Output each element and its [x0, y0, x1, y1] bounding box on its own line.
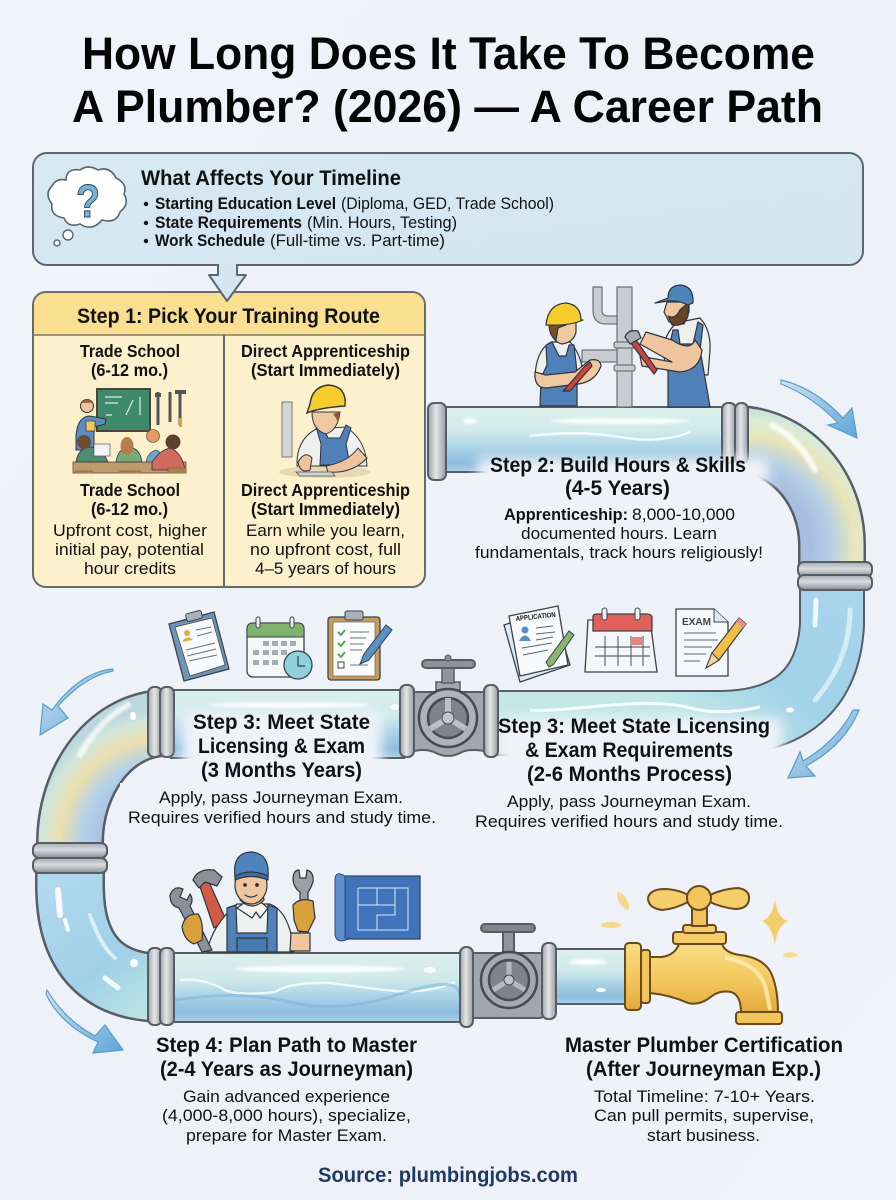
column: direct apprenticeship: no upfront cost, full: [250, 540, 401, 559]
text block: master plumber certification: start business.: [647, 1126, 760, 1145]
pipe: bottom straight section: [170, 952, 465, 1023]
column: trade school: (6-12 mo.): [91, 360, 168, 380]
text block: step 3 right: & Exam Requirements: [525, 738, 733, 762]
column: trade school: Upfront cost, higher: [53, 521, 207, 540]
text block: step 3 left: (3 Months Years): [201, 758, 362, 782]
text block: step 2: documented hours. Learn: [521, 524, 717, 543]
arrow: top right: [781, 380, 857, 438]
text block: step 3 left: Step 3: Meet State: [193, 710, 370, 734]
pipe: middle straight section: [170, 689, 405, 759]
arrow: from timeline panel down to step 1: [209, 264, 246, 301]
icons: clipboard, calendar with clock, checklist: [169, 610, 392, 681]
icon: calendar with clock: [247, 617, 312, 679]
text block: step 4: [156, 1033, 418, 1145]
icon: profile clipboard: [169, 610, 229, 681]
text block: master plumber certification: Total Timeline: 7-10+ Years.: [594, 1087, 815, 1106]
icon: golden faucet: [625, 886, 782, 1024]
icons: application, calendar, exam: [504, 606, 746, 682]
bullet list: Starting Education Level: [155, 194, 336, 213]
pipe: upper right bend: [735, 425, 832, 570]
icon: application form: [504, 606, 574, 682]
decorative sparkles near faucet: [601, 890, 797, 958]
text block: step 2: [475, 453, 763, 562]
column: direct apprenticeship: Direct Apprenticeship: [241, 341, 410, 361]
pipe: left lower bend: [58, 868, 165, 988]
bullet list: Work Schedule: [155, 231, 265, 250]
column: direct apprenticeship: 4–5 years of hours: [255, 559, 396, 578]
journeyman plumber: [625, 285, 710, 407]
text block: step 4: Gain advanced experience: [183, 1087, 390, 1106]
pipe flanges: [33, 403, 872, 1025]
text block: step 4: (2-4 Years as Journeyman): [160, 1057, 413, 1081]
column: trade school: (6-12 mo.): [91, 499, 168, 519]
illustration: two plumbers working on a pipe: [535, 285, 710, 407]
icon: exam paper and pencil: EXAM: [682, 617, 711, 628]
column: direct apprenticeship: [241, 341, 410, 578]
text block: master plumber certification: Master Plumber Certification: [565, 1033, 843, 1057]
upright pipes: [582, 287, 635, 407]
pipe: top straight section: [430, 406, 730, 473]
text block: step 2: Apprenticeship:: [504, 505, 628, 524]
heading: step 1: Step 1: Pick Your Training Route: [77, 304, 380, 328]
text block: step 2: Step 2: Build Hours & Skills: [490, 453, 746, 477]
bullet list: State Requirements: [155, 213, 302, 232]
icon: apprentice with hard hat: [279, 385, 371, 478]
icon: classroom: [73, 389, 186, 473]
text block: step 3 right: Apply, pass Journeyman Exam.: [507, 792, 751, 811]
column: direct apprenticeship: Earn while you learn,: [246, 521, 405, 540]
arrow: left lower: [46, 990, 123, 1053]
text block: master plumber certification: Can pull permits, supervise,: [594, 1106, 814, 1125]
title: How Long Does It Take To Become: [82, 28, 815, 79]
column: direct apprenticeship: (Start Immediately): [251, 499, 400, 519]
journeyman plumber figure: [170, 852, 315, 952]
bullet list: (Min. Hours, Testing): [307, 213, 457, 232]
bullet list: [144, 194, 554, 250]
arrow: right lower: [788, 710, 859, 778]
column: trade school: initial pay, potential: [55, 540, 204, 559]
text block: step 3 right: [475, 714, 783, 831]
valve: middle pipe: [400, 655, 498, 757]
pipe: lower right bend: [490, 585, 850, 723]
text block: step 2: 8,000-10,000: [632, 505, 735, 524]
title: [72, 28, 823, 132]
pipe: section before faucet: [555, 948, 627, 1005]
title: A Plumber? (2026) — A Career Path: [72, 81, 823, 132]
text glows fading the pipe behind the labels: [182, 458, 782, 802]
bullet list: (Diploma, GED, Trade School): [341, 194, 554, 213]
icon: checklist clipboard: [328, 611, 392, 680]
column: trade school: Trade School: [80, 341, 180, 361]
icon: blueprint: [335, 874, 420, 941]
text block: master plumber certification: (After Journeyman Exp.): [586, 1057, 821, 1081]
icon: thought cloud with question mark: ?: [76, 175, 100, 227]
text block: step 3 right: Requires verified hours and study time.: [475, 812, 783, 831]
text block: step 3 left: Apply, pass Journeyman Exam.: [159, 788, 403, 807]
text block: step 3 left: Licensing & Exam: [198, 734, 365, 758]
column: direct apprenticeship: Direct Apprenticeship: [241, 480, 410, 500]
text block: step 3 right: Step 3: Meet State Licensing: [498, 714, 770, 738]
icon: thought cloud with question mark: [48, 167, 126, 246]
column: trade school: Trade School: [80, 480, 180, 500]
illustration: journeyman plumber with tools and blueprint: [170, 852, 420, 952]
arrow: left upper: [40, 669, 113, 735]
panel: what affects your timeline: [33, 153, 863, 265]
pipe: left upper bend: [70, 705, 165, 850]
text block: step 3 left: [128, 710, 436, 827]
valve: bottom pipe: [460, 924, 556, 1027]
heading: what affects your timeline: What Affects Your Timeline: [141, 166, 401, 190]
source line: Source: plumbingjobs.com: [318, 1163, 578, 1187]
text block: step 4: (4,000-8,000 hours), specialize,: [162, 1106, 411, 1125]
column: direct apprenticeship: (Start Immediately): [251, 360, 400, 380]
text block: step 2: (4-5 Years): [565, 476, 670, 500]
pipeline: water pipe running through all the steps: [33, 403, 872, 1025]
panel: step 1 pick your training route: [33, 292, 425, 587]
text block: step 3 right: (2-6 Months Process): [527, 762, 732, 786]
icon: calendar: [585, 608, 657, 672]
column: trade school: [53, 341, 207, 578]
bullet list: (Full-time vs. Part-time): [270, 231, 445, 250]
text block: step 2: fundamentals, track hours religiously!: [475, 543, 763, 562]
step 1 header band: [33, 293, 425, 335]
text block: step 4: Step 4: Plan Path to Master: [156, 1033, 418, 1057]
icon: application form: APPLICATION: [515, 612, 556, 623]
text block: step 3 left: Requires verified hours and study time.: [128, 808, 436, 827]
text block: step 4: prepare for Master Exam.: [186, 1126, 387, 1145]
icon: exam paper and pencil: [676, 609, 746, 676]
apprentice plumber: [535, 303, 601, 406]
column: trade school: hour credits: [84, 559, 176, 578]
text block: master plumber certification: [565, 1033, 843, 1145]
